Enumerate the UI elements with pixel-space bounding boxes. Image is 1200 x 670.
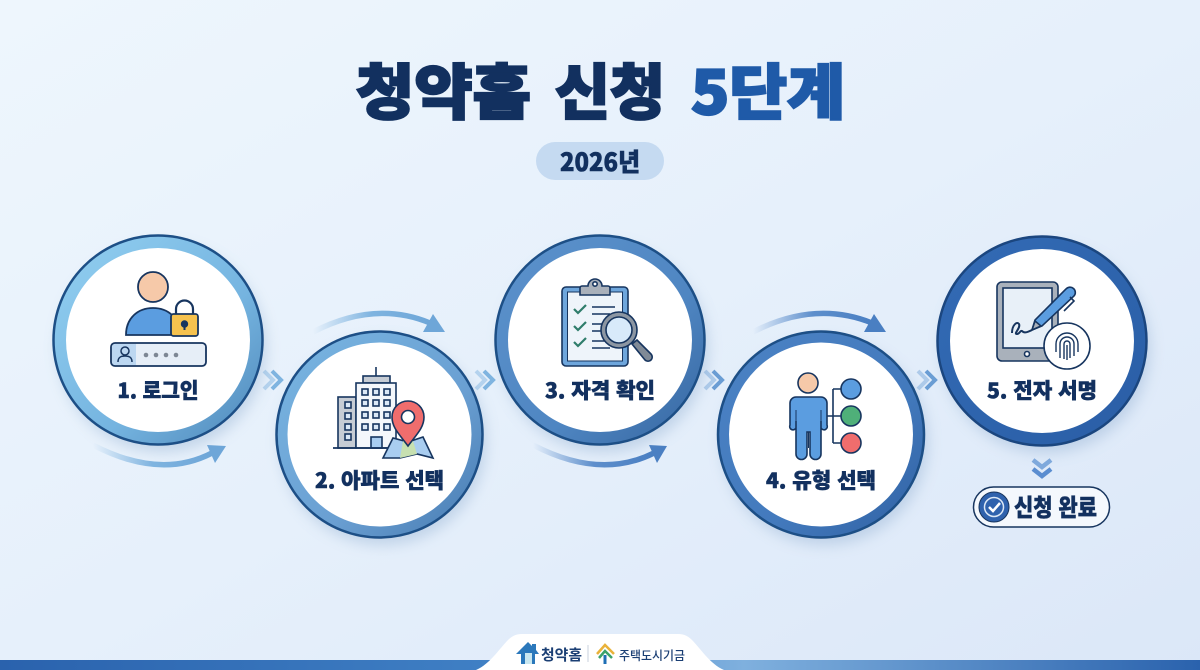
badge: application complete: 신청 완료: [1014, 488, 1097, 523]
icon: clipboard with magnifier: [562, 279, 652, 366]
step 5: e-signature: [938, 236, 1150, 453]
text: HUG name: 주택도시기금: [619, 645, 685, 664]
title: [356, 45, 845, 132]
step 1: login: [54, 236, 266, 452]
icon: person with options: [790, 373, 861, 460]
logo: HUG: [597, 645, 614, 664]
arrow: chevrons 4 to 5: [918, 371, 935, 389]
label: step 2: 2. 아파트 선택: [315, 465, 444, 495]
step 3: eligibility check: [496, 236, 708, 452]
arrow: chevrons 1 to 2: [264, 371, 281, 389]
arrow: chevrons 2 to 3: [476, 371, 493, 389]
title: 신청: [555, 45, 665, 132]
label: step 5: 5. 전자 서명: [987, 375, 1097, 405]
arrow: curved 1 to 2: [93, 445, 226, 465]
logo: Cheongyak Home house: [516, 642, 539, 664]
step 2: apartment: [276, 332, 486, 545]
arrow: chevrons 3 to 4: [705, 371, 722, 389]
title: 5단계: [691, 45, 845, 132]
footer bar: [0, 660, 1200, 670]
title: 청약홈: [356, 45, 531, 132]
label: step 1: 1. 로그인: [118, 375, 198, 405]
year badge: 2026년: [560, 143, 640, 179]
year badge: [536, 142, 664, 180]
icon: tablet, pen and fingerprint: [997, 282, 1090, 369]
label: step 3: 3. 자격 확인: [545, 375, 655, 405]
step 4: type selection: [718, 332, 928, 545]
icon: building with map pin: [333, 367, 433, 458]
footer tab with logos: [476, 634, 724, 670]
icon: user with lock: [111, 272, 206, 366]
badge: application complete: [974, 487, 1110, 527]
label: step 4: 4. 유형 선택: [766, 465, 876, 495]
text: Cheongyak Home: 청약홈: [541, 644, 582, 665]
arrow: curved 2 to 3: [313, 313, 445, 332]
arrow: down chevrons: [1033, 460, 1051, 476]
arrow: curved 4 to 5: [753, 313, 886, 332]
arrow: curved 3 to 4: [533, 445, 667, 465]
